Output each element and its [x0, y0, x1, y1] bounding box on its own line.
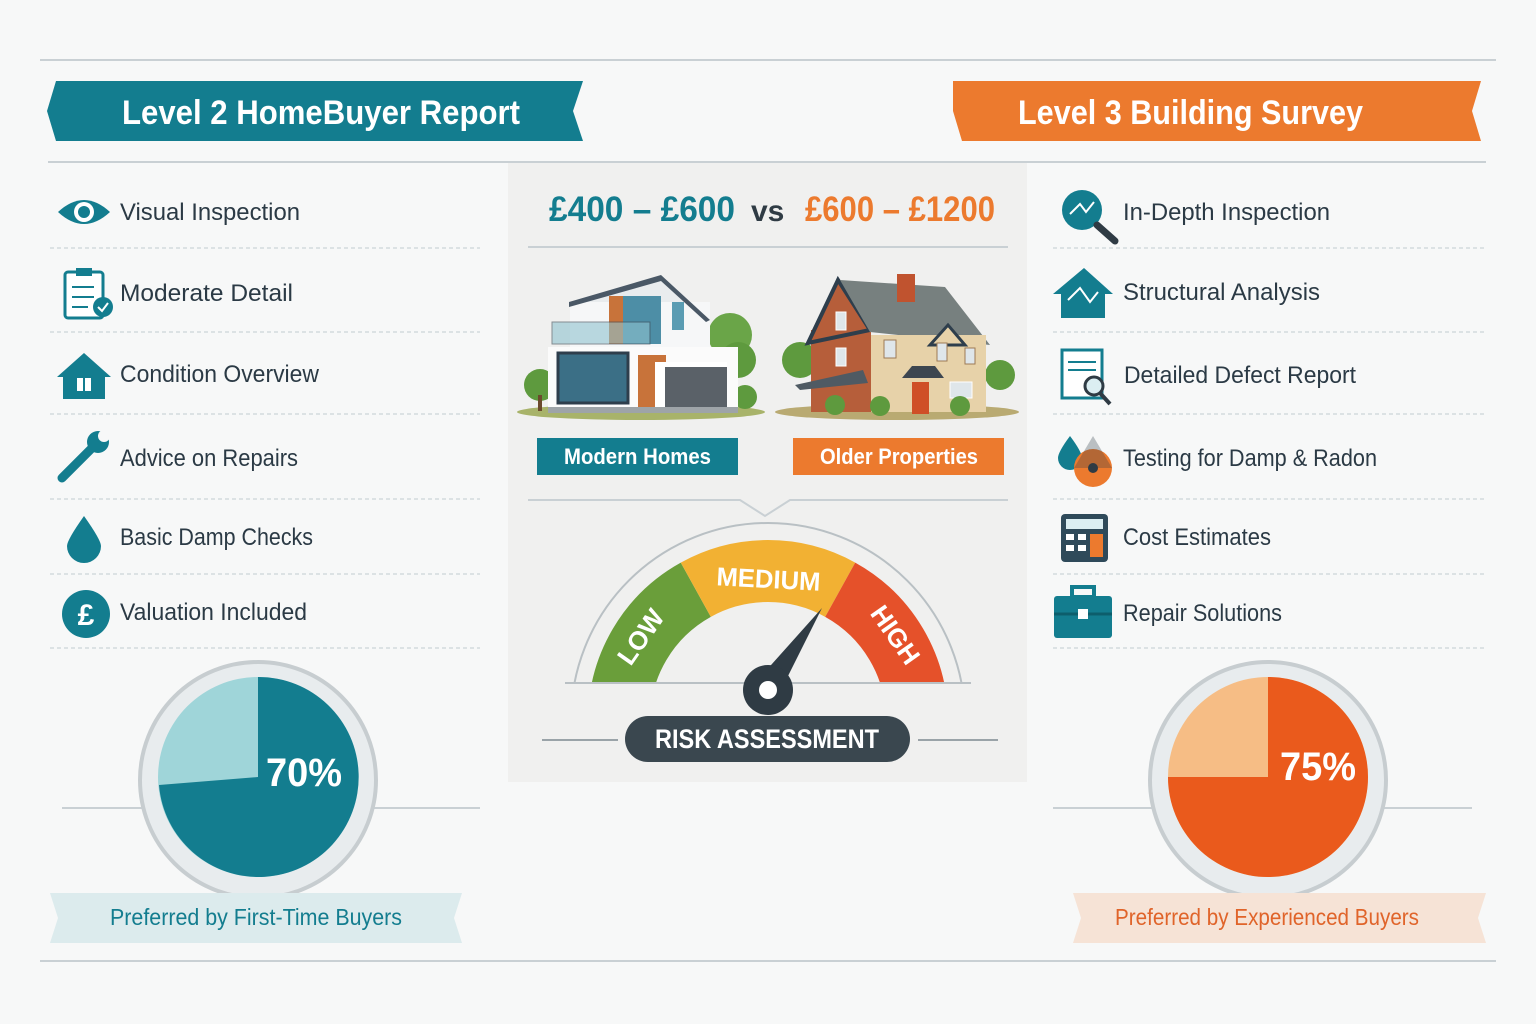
- price comparison: £400 – £600: [549, 190, 735, 229]
- icon: pound coin: [62, 590, 110, 638]
- list: Level 2 features: Moderate Detail: [120, 280, 293, 307]
- list: Level 3 features: Structural Analysis: [1123, 279, 1320, 306]
- chart: pie 75%: [1053, 662, 1472, 898]
- list: Level 2 features: [50, 199, 480, 648]
- icon: report: [1062, 350, 1110, 404]
- price comparison: vs: [751, 195, 784, 228]
- list: Level 2 features: Advice on Repairs: [120, 445, 298, 472]
- label: Older Properties: [793, 438, 1004, 475]
- label: Older Properties: Older Properties: [820, 444, 978, 469]
- icon: water drop: [67, 516, 101, 563]
- price comparison: [549, 190, 995, 229]
- callout: first-time buyers: Preferred by First-Time Buyers: [110, 904, 402, 930]
- list: Level 3 features: In-Depth Inspection: [1123, 199, 1330, 226]
- price comparison: £600 – £1200: [805, 190, 995, 229]
- illustration: modern home: [517, 275, 765, 420]
- icon: eye: [58, 200, 110, 224]
- chart: risk gauge: [565, 523, 971, 720]
- banner: Level 3 Building Survey: Level 3 Building Survey: [1018, 94, 1363, 132]
- list: Level 2 features: Visual Inspection: [120, 199, 300, 226]
- needle: [743, 608, 822, 715]
- callout: experienced buyers: [1073, 893, 1486, 943]
- icon: magnifier: [1062, 190, 1115, 241]
- label: Risk Assessment: RISK ASSESSMENT: [655, 724, 879, 754]
- list: Level 3 features: Repair Solutions: [1123, 600, 1282, 627]
- callout: first-time buyers: [50, 893, 462, 943]
- list: Level 2 features: Condition Overview: [120, 361, 320, 388]
- center panel: [508, 163, 1027, 782]
- chart: risk gauge: HIGH: [864, 600, 926, 670]
- label: Risk Assessment: [542, 716, 998, 762]
- banner: Level 3 Building Survey: [953, 81, 1481, 141]
- chart: risk gauge: MEDIUM: [716, 561, 821, 597]
- banner: Level 2 HomeBuyer Report: Level 2 HomeBuyer Report: [122, 94, 520, 132]
- label: Modern Homes: [537, 438, 738, 475]
- label: Modern Homes: Modern Homes: [564, 444, 711, 469]
- callout: experienced buyers: Preferred by Experienced Buyers: [1115, 904, 1419, 930]
- list: Level 3 features: Detailed Defect Report: [1124, 362, 1356, 389]
- icon: structure house: [1053, 268, 1113, 318]
- list: Level 3 features: Cost Estimates: [1123, 524, 1271, 551]
- list: Level 2 features: Basic Damp Checks: [120, 524, 313, 551]
- chart: pie 75%: 75%: [1280, 745, 1356, 789]
- list: Level 3 features: Testing for Damp & Radon: [1123, 445, 1377, 472]
- icon: wrench: [62, 430, 110, 478]
- icon: toolbox: [1054, 587, 1112, 638]
- icon: house: [57, 353, 111, 399]
- list: Level 2 features: Valuation Included: [120, 599, 307, 626]
- banner: Level 2 HomeBuyer Report: [47, 81, 583, 141]
- icon: pound coin: £: [78, 599, 95, 632]
- icon: clipboard: [65, 268, 113, 318]
- chart: pie 70%: [62, 662, 480, 898]
- chart: risk gauge: LOW: [611, 603, 671, 670]
- list: Level 3 features: [1053, 190, 1486, 648]
- icon: calculator: [1061, 514, 1108, 562]
- illustration: older property: [775, 274, 1019, 420]
- icon: damp and radon: [1058, 436, 1112, 487]
- chart: pie 70%: 70%: [266, 751, 342, 795]
